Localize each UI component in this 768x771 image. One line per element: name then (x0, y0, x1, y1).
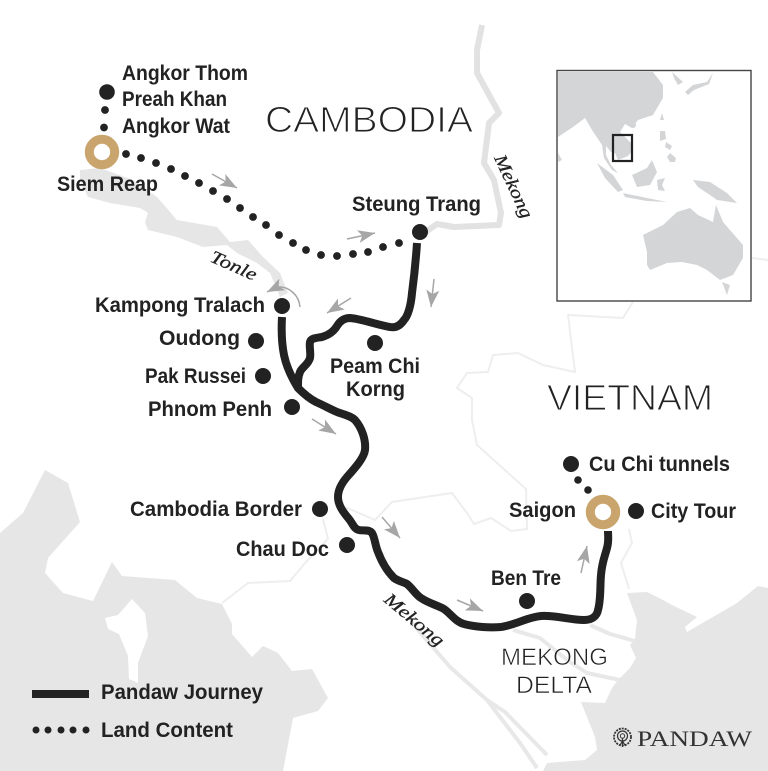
logo wordmark: PANDAW (637, 726, 753, 751)
place labels: Preah Khan (122, 87, 227, 111)
hub ring: Siem Reap (89, 139, 115, 165)
place labels: Oudong (159, 326, 240, 350)
inset landmasses (558, 72, 743, 295)
place labels: Siem Reap (57, 172, 158, 196)
mekong river upper (424, 25, 501, 233)
mekong delta channels (412, 623, 635, 768)
legend: pandaw journey swatch (32, 690, 89, 698)
place labels: Pak Russei (145, 364, 246, 388)
direction arrows (212, 174, 587, 611)
tonle sap lake (80, 168, 288, 297)
pandaw journey route (282, 243, 608, 627)
place labels: Phnom Penh (148, 397, 272, 421)
legend (32, 680, 263, 742)
place labels: Steung Trang (352, 192, 481, 216)
place labels: Korng (346, 377, 405, 401)
country borders (222, 258, 768, 603)
inset locator map (557, 70, 751, 301)
inset location box (613, 135, 632, 161)
place labels: Chau Doc (236, 537, 329, 561)
place labels (57, 61, 737, 590)
sea: gulf of thailand (0, 470, 328, 771)
hub ring: Saigon (590, 499, 616, 525)
legend: pandaw journey text: Pandaw Journey (101, 680, 263, 704)
country label: Cambodia: CAMBODIA (265, 99, 473, 140)
region label: Mekong Delta: MEKONG (501, 644, 608, 671)
region label: Mekong Delta: DELTA (516, 672, 593, 699)
pandaw logo (614, 726, 753, 751)
place labels: Saigon (509, 498, 576, 522)
region label: Mekong Delta (501, 644, 608, 699)
river label: Tonle: Tonle (207, 246, 260, 285)
place labels: Cu Chi tunnels (589, 452, 730, 476)
country label: Vietnam: VIETNAM (547, 377, 713, 418)
place labels: Cambodia Border (130, 497, 303, 521)
place labels: Kampong Tralach (95, 293, 265, 317)
sea: south china sea (543, 586, 768, 771)
logo emblem (614, 728, 631, 747)
stop markers (99, 84, 644, 609)
land route: Siem Reap to Steung Trang (122, 150, 403, 260)
place labels: Angkor Thom (122, 61, 248, 85)
river label: Mekong lower: Mekong (379, 588, 448, 650)
place labels: Angkor Wat (122, 114, 230, 138)
river label: Mekong upper: Mekong (490, 150, 537, 221)
place labels: City Tour (651, 499, 737, 523)
place labels: Peam Chi (330, 354, 420, 378)
legend: land content dots (32, 726, 90, 734)
legend: land content text: Land Content (101, 718, 233, 742)
place labels: Ben Tre (491, 566, 561, 590)
